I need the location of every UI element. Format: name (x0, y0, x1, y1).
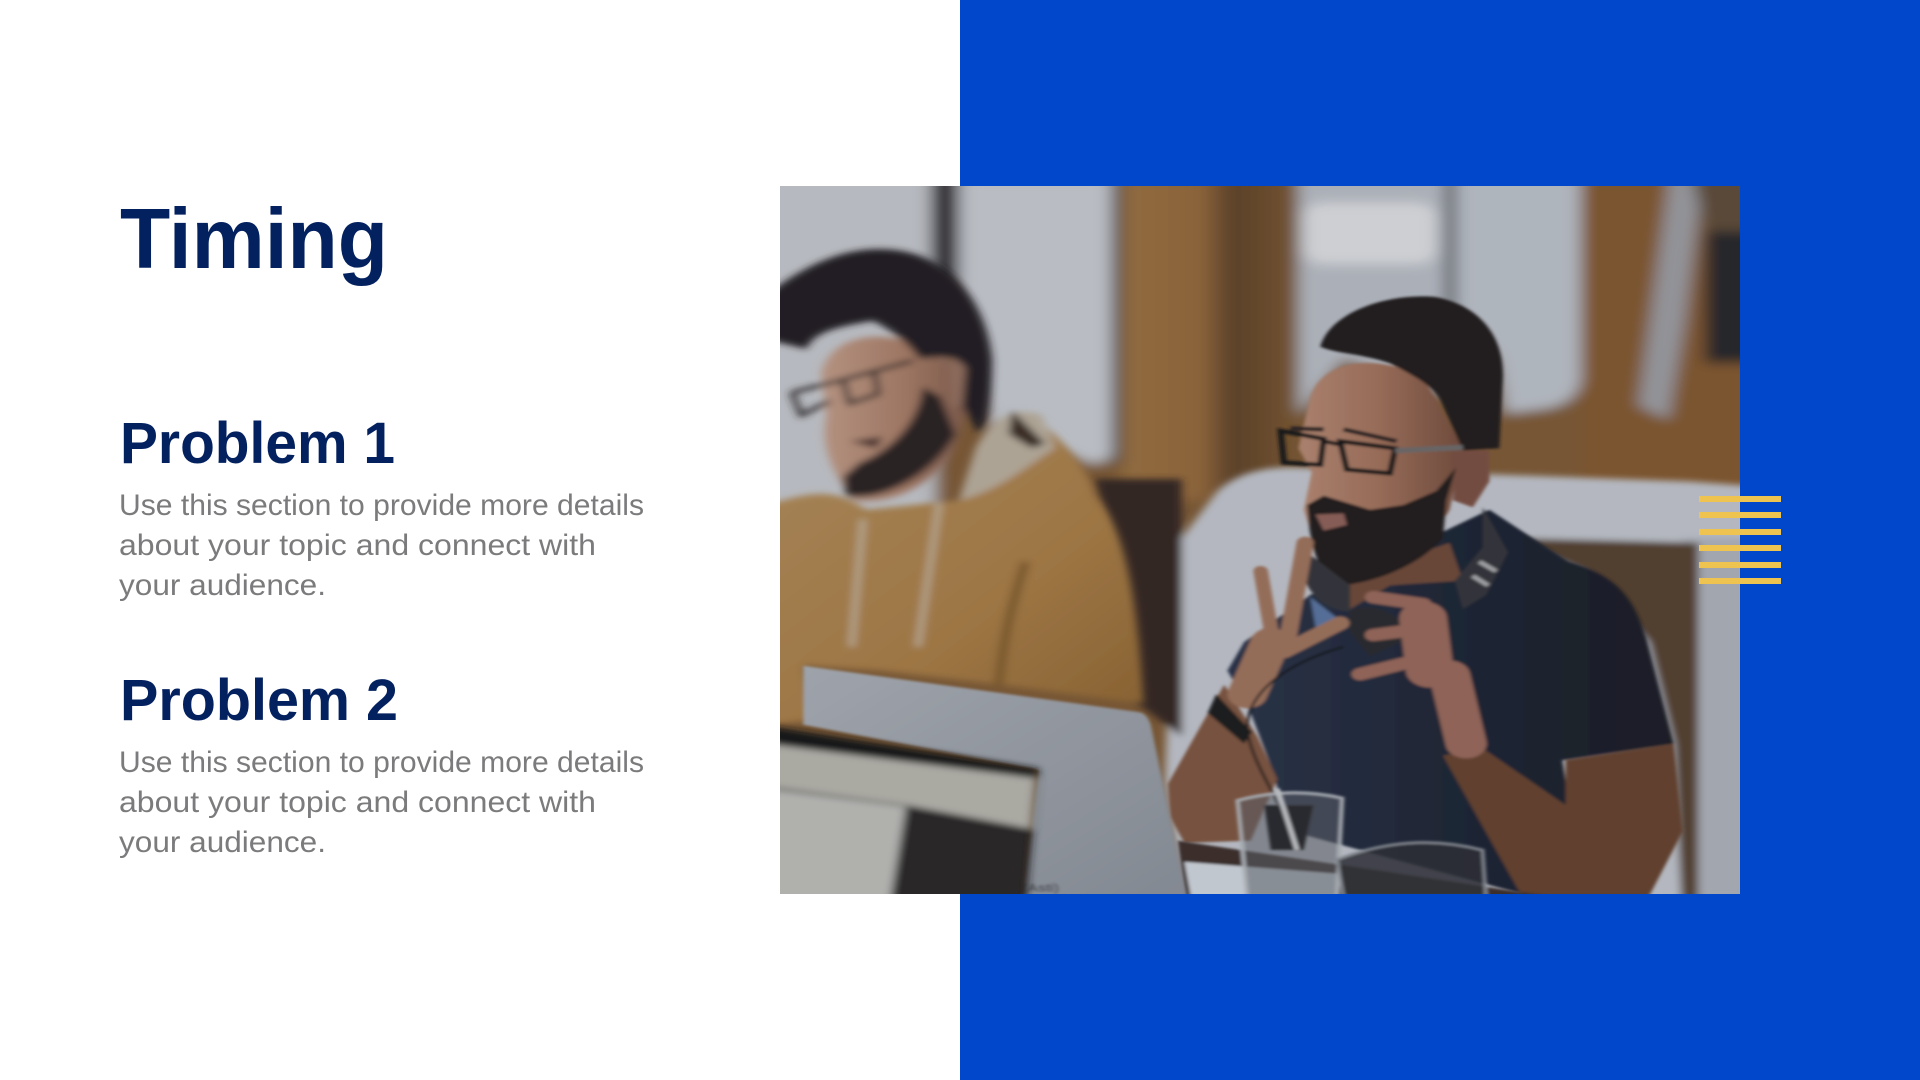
background: cabin interior (747, 160, 1768, 916)
face (821, 337, 972, 501)
headphones (1302, 507, 1508, 656)
body text: problem 2: your audience. (119, 826, 326, 859)
heading: problem 1: Problem 1 (120, 411, 395, 476)
beard (843, 387, 956, 497)
background: bench and seats (1095, 467, 1761, 907)
photo: two men working on laptops (780, 186, 1740, 894)
raised hand (1247, 543, 1340, 694)
blue background panel (960, 0, 1920, 1080)
right man (1168, 296, 1683, 897)
hair (747, 249, 992, 434)
body text: problem 2: Use this section to provide more details (119, 746, 644, 779)
left man in mustard hoodie (747, 249, 1143, 727)
left forearm (1168, 685, 1277, 843)
hair (1320, 296, 1503, 451)
photo tint overlay (780, 186, 1740, 894)
silver laptop (803, 666, 1188, 900)
neck (1324, 543, 1463, 609)
beard (1307, 467, 1456, 585)
cable (1247, 647, 1344, 850)
yellow stripes accent (1699, 496, 1781, 584)
body text: problem 1: your audience. (119, 569, 326, 602)
glasses (792, 361, 913, 415)
section: problem 1 (119, 411, 644, 602)
second glass (1337, 842, 1486, 897)
table items (1178, 789, 1556, 897)
heading: problem 2: Problem 2 (120, 668, 398, 733)
body text: problem 1: Use this section to provide more details (119, 489, 644, 522)
section: problem 2 (119, 668, 644, 859)
body text: problem 1 (119, 489, 644, 602)
body text: problem 2 (119, 746, 644, 859)
title: Timing (120, 192, 388, 287)
silver laptop: (Asti) (1022, 881, 1059, 894)
face (1298, 363, 1463, 572)
hoodie (747, 420, 1143, 727)
left text column (119, 192, 644, 859)
drinking glass (1237, 793, 1342, 897)
shirt (1228, 510, 1674, 894)
right arm (1443, 744, 1683, 897)
body text: problem 1: about your topic and connect with (119, 529, 596, 562)
foreground laptop (747, 722, 1039, 907)
body text: problem 2: about your topic and connect with (119, 786, 596, 819)
glasses (1281, 431, 1463, 473)
hand on headphones (1360, 597, 1466, 744)
watch (1208, 694, 1252, 744)
eyebrows (1290, 428, 1397, 441)
